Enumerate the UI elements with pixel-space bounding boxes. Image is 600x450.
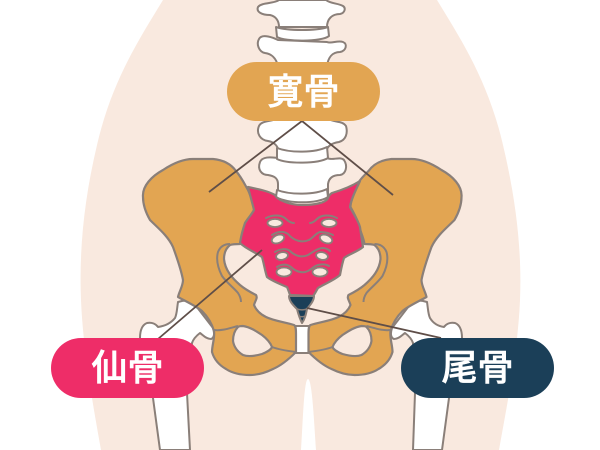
sacrum <box>240 181 363 296</box>
spine <box>258 0 347 202</box>
label: coccyx <box>401 338 554 398</box>
left ilium and pubis <box>143 159 296 375</box>
body silhouette <box>81 0 520 450</box>
disc lower <box>276 189 328 202</box>
disc middle <box>277 147 328 163</box>
label: hip bone <box>227 62 380 121</box>
left pubic ridge <box>214 326 296 352</box>
right inner arc <box>364 244 387 302</box>
label: sacrum <box>51 338 204 398</box>
vertebra 3 <box>258 118 347 152</box>
right hip bone <box>308 159 462 375</box>
label: sacrum: 仙骨 <box>91 347 164 388</box>
coccyx bone <box>289 296 314 323</box>
vertebra 4 <box>259 157 346 196</box>
disc upper <box>276 27 329 41</box>
coccyx segment line <box>297 309 307 317</box>
label: hip bone: 寛骨 <box>267 71 340 112</box>
right femur <box>391 300 462 450</box>
left femur <box>140 300 214 450</box>
pubic symphysis <box>295 326 310 353</box>
sacral foramina <box>268 219 336 276</box>
left obturator foramen <box>233 326 272 356</box>
leader line: hip bone right <box>302 121 393 195</box>
left inner arc <box>217 244 241 302</box>
left hip bone <box>143 159 296 375</box>
right ilium and pubis <box>308 159 462 375</box>
leader line: coccyx <box>307 308 441 338</box>
leader line: hip bone left <box>209 121 302 192</box>
label: coccyx: 尾骨 <box>441 347 514 388</box>
right pubic ridge <box>308 326 390 352</box>
vertebra 2 <box>258 36 346 66</box>
sacrum body <box>240 181 363 296</box>
leader line: sacrum <box>158 250 262 339</box>
vertebra 1 <box>258 0 345 27</box>
coccyx <box>289 296 314 323</box>
right obturator foramen <box>332 326 372 356</box>
sacral ridges <box>266 215 337 272</box>
